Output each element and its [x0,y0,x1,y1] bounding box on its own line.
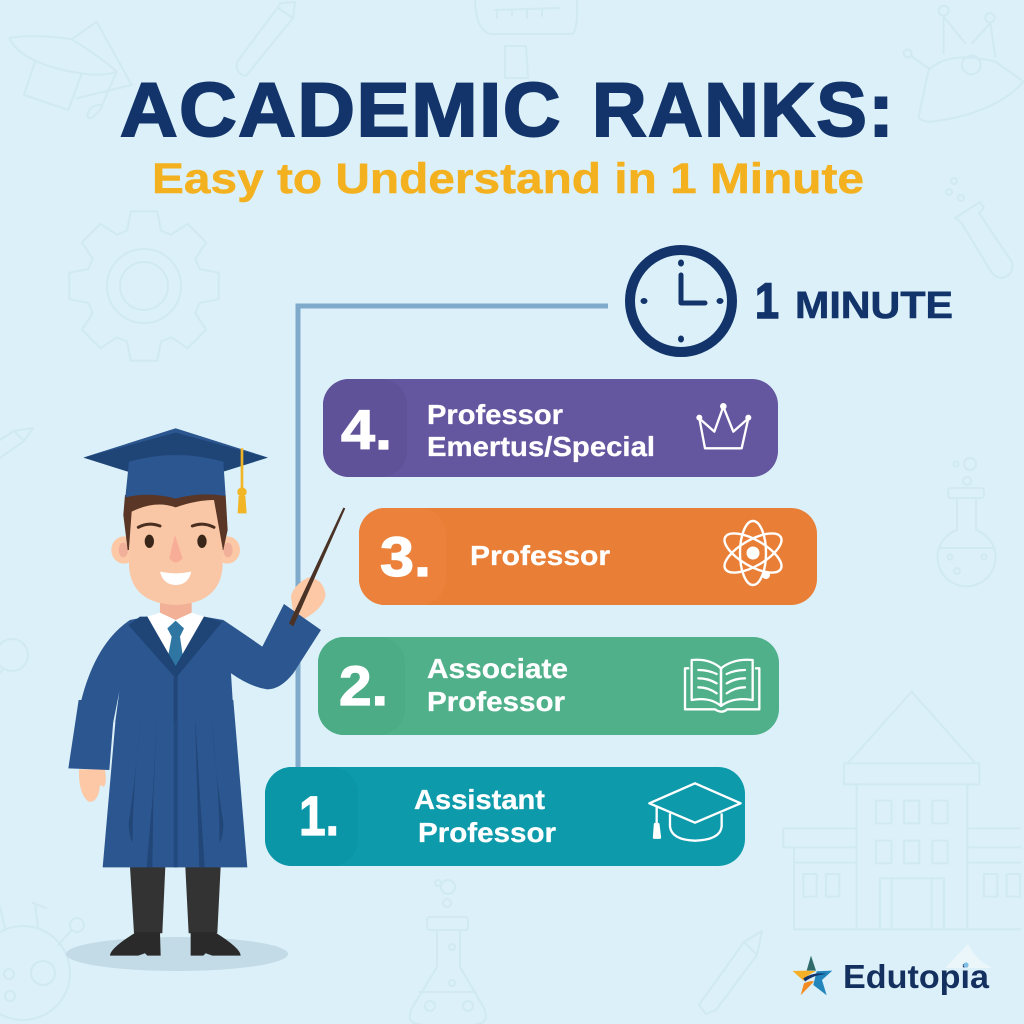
icon: open book [685,660,759,712]
rank label 2: Associate [427,653,568,684]
time label: 1 [755,273,779,329]
rank label 1 [414,784,556,848]
icon: background pencil bottom [699,931,762,1014]
icon: background graduation cap [9,22,132,118]
face [129,500,223,605]
icon: background ruler and stand [475,0,577,78]
rank label 4 [427,399,655,462]
rank label 2: Professor [427,686,565,717]
rank label 3: Professor [470,540,610,571]
connector line [298,306,608,768]
icon: background pencil left [0,428,33,458]
tie [167,621,184,666]
mortarboard [83,428,268,487]
rank label 1: Assistant [414,784,545,815]
panel: rank 3 [359,508,817,605]
rank number 2: 2. [339,654,388,717]
tassel [241,448,243,488]
rank number 1: 1. [299,784,339,847]
icon: background flask bottom [410,880,486,1024]
rank label 4: Emertus/Special [427,431,655,462]
icon: crown [696,403,751,448]
subtitle: Easy to Understand in 1 Minute [152,155,864,203]
icon: atom [719,521,787,585]
neck [160,598,192,620]
eyes [145,535,154,548]
logo: Edutopia [793,944,992,995]
icon: clock [630,250,732,352]
rank label 1: Professor [418,817,556,848]
panel: rank 4 [323,379,778,477]
logo wordmark: Edutopia [843,958,990,995]
ears [111,536,137,564]
icon: background gear [69,211,219,361]
character lower gown [68,700,247,867]
panel: rank 2 [318,637,779,735]
icon: background crown and beaker [904,6,1024,122]
icon: background test tube [946,178,1012,278]
gown lapels [128,617,222,678]
cap body [125,455,226,499]
panel: rank 1 [265,767,745,866]
icon: background circle left [0,639,28,673]
nose [169,535,183,562]
shirt collar [147,613,204,655]
character legs and shoes [110,867,241,956]
time label [755,273,953,329]
title: ACADEMIC [120,68,562,153]
rank number 4: 4. [341,398,392,461]
rank label 4: Professor [427,399,563,430]
time label: MINUTE [795,285,953,327]
mouth [160,572,191,585]
icon: background university building [783,692,1020,929]
illustration: graduate with pointer [66,428,345,971]
eyebrows [138,524,214,527]
icon: background flask right [937,458,995,586]
title: RANKS: [592,68,895,153]
logo background glow [945,944,992,968]
pointer stick [289,508,345,626]
hand raised [291,577,326,618]
icon: background pencil top [237,2,295,76]
gown torso and raised arm [77,604,321,722]
icon: logo star [793,956,832,995]
hair [123,492,228,550]
logo i dot [963,962,969,968]
rank number 3: 3. [380,525,431,588]
title [120,68,895,153]
icon: background atom bottom left [0,903,84,1020]
character shadow [66,937,288,971]
rank label 2 [427,653,568,717]
character upper body and head [77,428,345,722]
icon: graduation cap [649,783,741,841]
